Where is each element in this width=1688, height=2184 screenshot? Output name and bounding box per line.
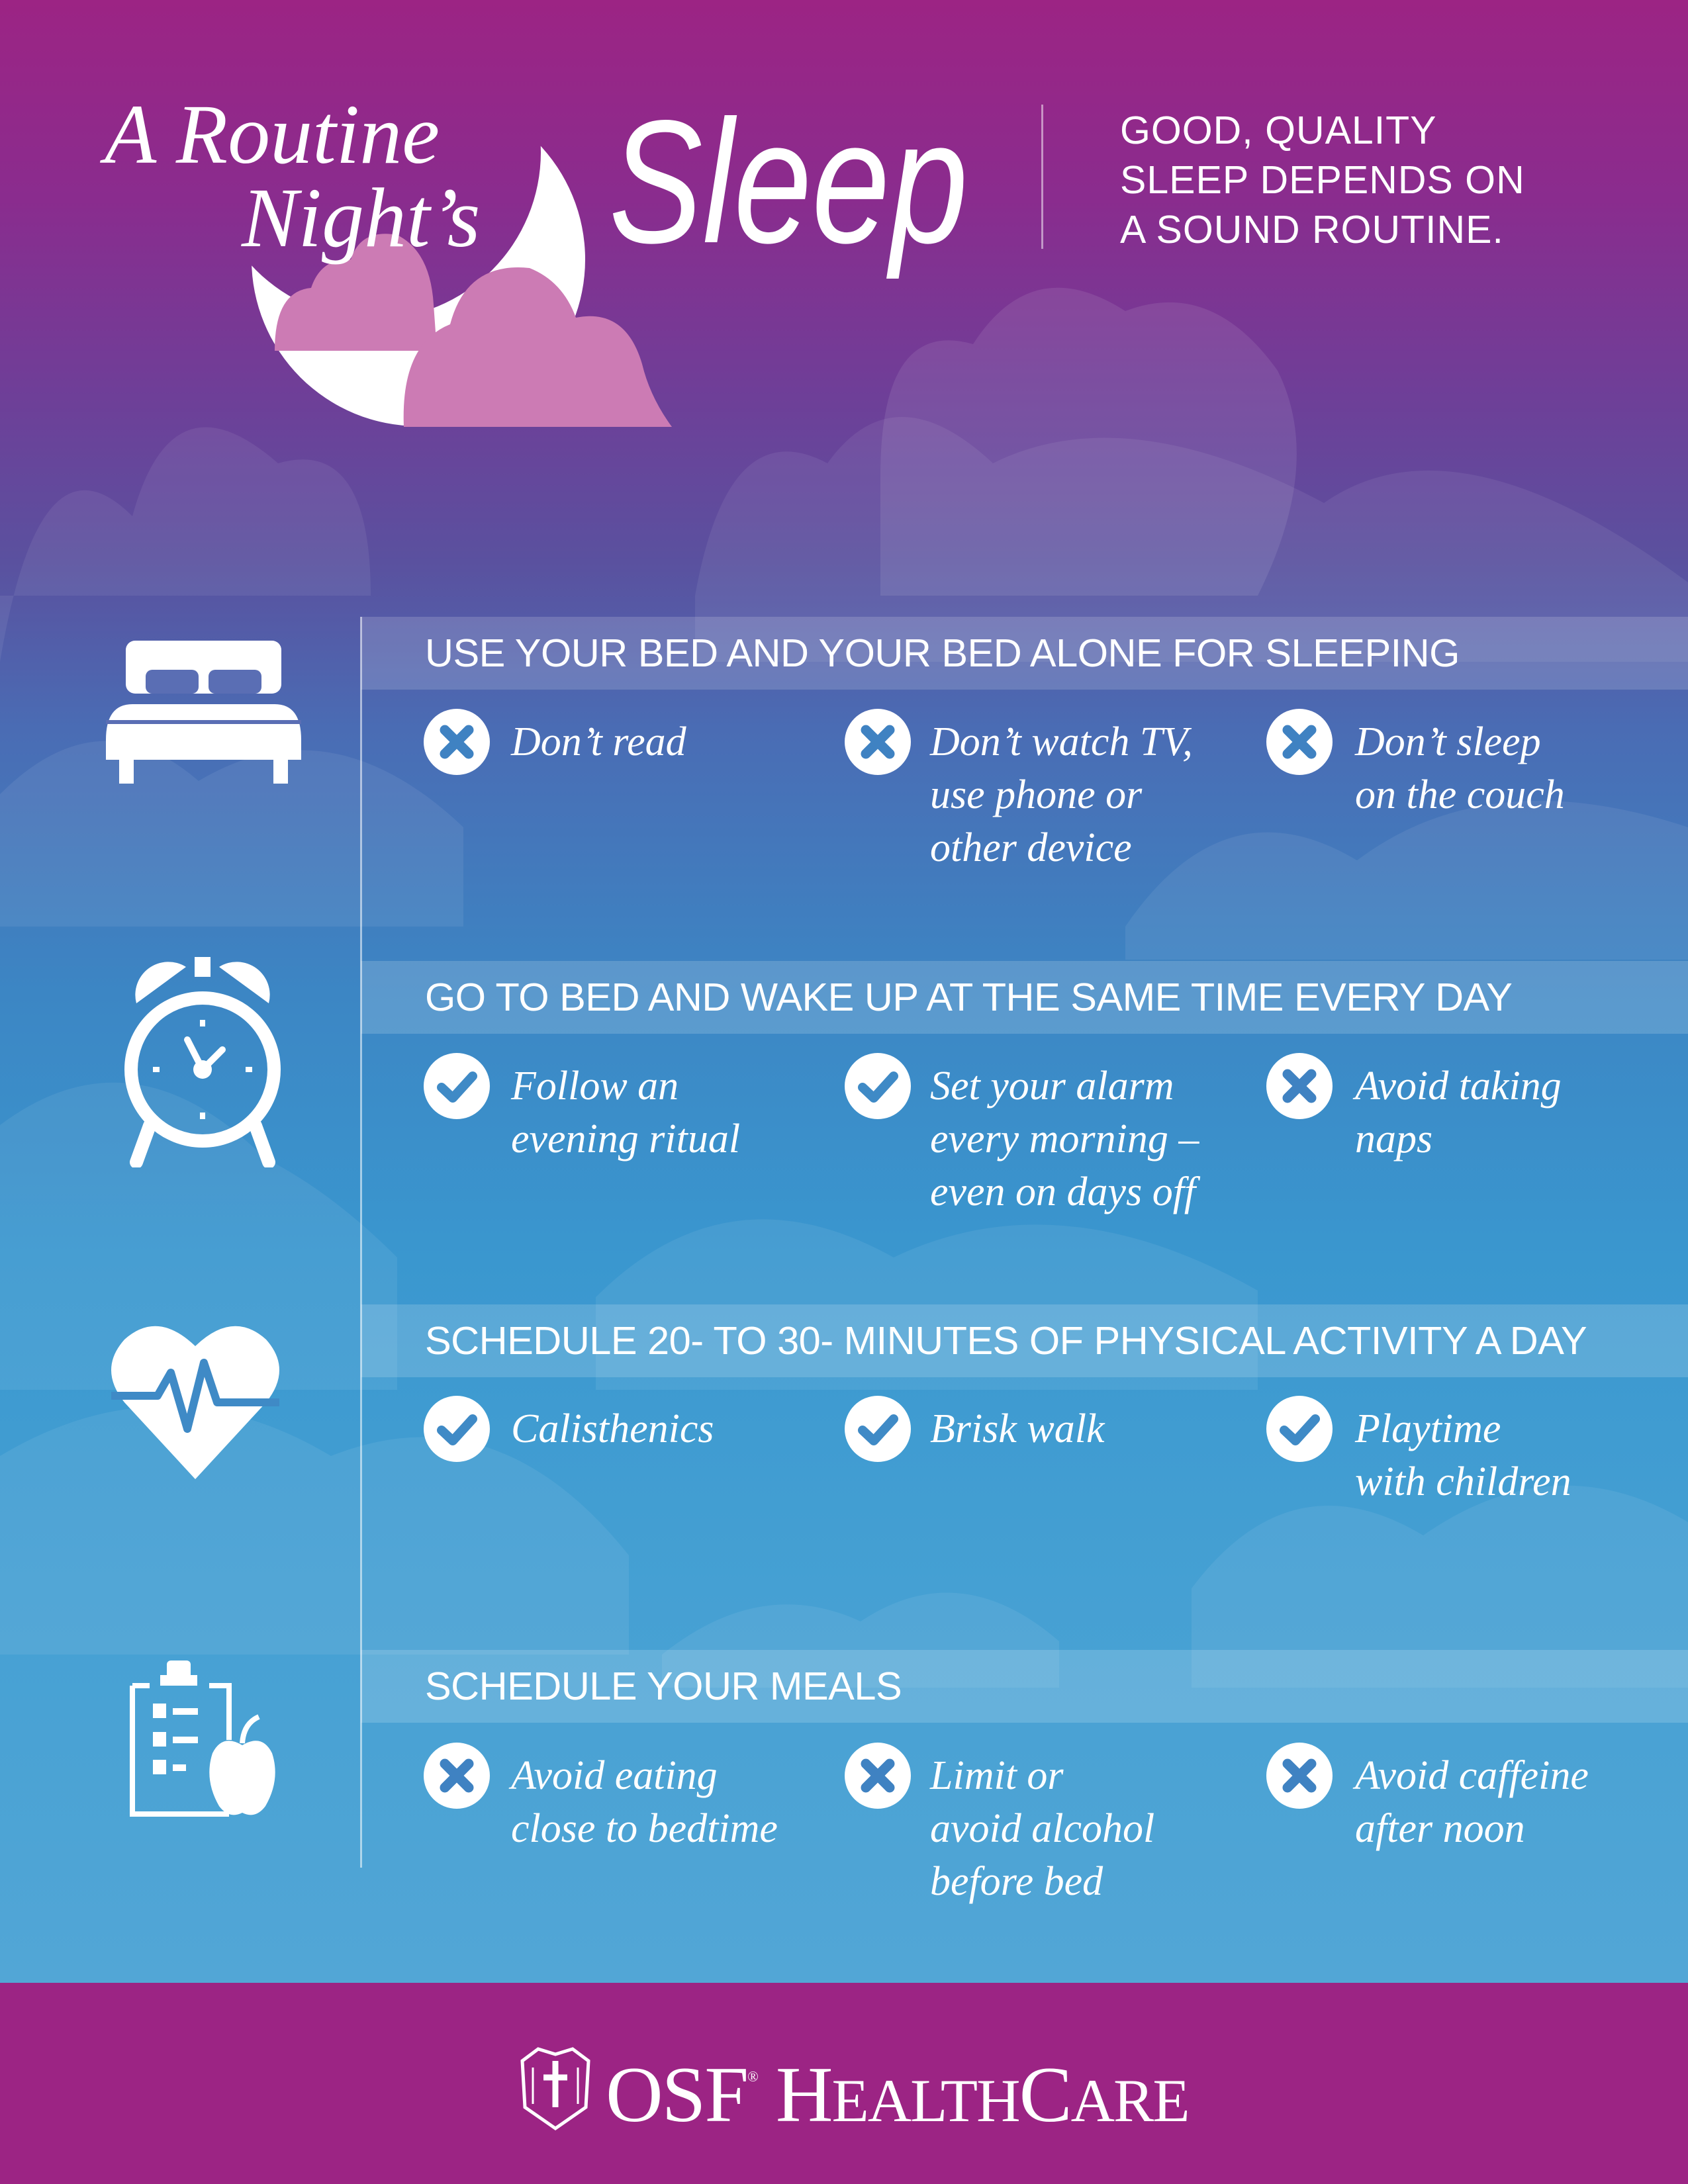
title (100, 84, 968, 280)
panel: heart: Calisthenics (511, 1406, 714, 1451)
panel: clock: every morning – (930, 1116, 1199, 1161)
panel: heart: with children (1355, 1459, 1571, 1504)
heading: SCHEDULE YOUR MEALS (425, 1664, 902, 1708)
panel: clock: Avoid taking (1355, 1064, 1562, 1109)
panel: heart: Brisk walk (930, 1406, 1104, 1451)
heading: GO TO BED AND WAKE UP AT THE SAME TIME EVERY DAY (425, 975, 1512, 1019)
title: Night’s (242, 171, 480, 265)
panel: meals: avoid alcohol (930, 1806, 1154, 1851)
panel: meals (130, 1650, 1688, 1904)
icon: pink cloud large (404, 267, 672, 427)
icon: heart (111, 1326, 279, 1479)
panel: bed: use phone or (930, 772, 1142, 817)
panel: meals: Limit or (930, 1753, 1064, 1798)
tagline (1120, 109, 1525, 251)
panel: bed: on the couch (1355, 772, 1565, 817)
panel: meals: Avoid caffeine (1355, 1753, 1589, 1798)
panel: meals: Avoid eating (511, 1753, 718, 1798)
title: Sleep (609, 84, 968, 280)
title: A Routine (105, 87, 440, 181)
panel: bed: other device (930, 825, 1132, 870)
panel: bed: Don’t sleep (1355, 719, 1541, 764)
tagline: A SOUND ROUTINE. (1120, 208, 1504, 251)
icon: bed (106, 641, 301, 784)
tagline: GOOD, QUALITY (1120, 109, 1437, 152)
panel: meals: after noon (1355, 1806, 1525, 1851)
icon: pink cloud small (275, 234, 437, 351)
panel: clock: naps (1355, 1116, 1432, 1161)
moon with pink clouds (252, 146, 672, 427)
panel: clock: evening ritual (511, 1116, 740, 1161)
icon: crescent moon (252, 146, 585, 426)
panel: bed (106, 617, 1688, 870)
footer (0, 1983, 1688, 2184)
panel: meals: before bed (930, 1859, 1103, 1904)
heading: USE YOUR BED AND YOUR BED ALONE FOR SLEEPING (425, 631, 1460, 675)
panel: clock: Follow an (511, 1064, 679, 1109)
icon: alarm clock (124, 957, 281, 1167)
panel: clock (124, 957, 1688, 1214)
tagline: SLEEP DEPENDS ON (1120, 158, 1525, 202)
logo: crest (520, 2047, 590, 2130)
panel: clock: Set your alarm (930, 1064, 1174, 1109)
heading: SCHEDULE 20- TO 30- MINUTES OF PHYSICAL ACTIVITY A DAY (425, 1318, 1587, 1363)
icon: clipboard with apple (130, 1661, 275, 1817)
panel: bed: Don’t watch TV, (930, 719, 1193, 764)
panel: bed: Don’t read (511, 719, 686, 764)
panel: meals: close to bedtime (511, 1806, 778, 1851)
panel: heart: Playtime (1355, 1406, 1501, 1451)
panel: clock: even on days off (930, 1169, 1196, 1214)
panel: heart (111, 1304, 1688, 1504)
logo: wordmark: OSF® HEALTHCARE (606, 2050, 1189, 2138)
